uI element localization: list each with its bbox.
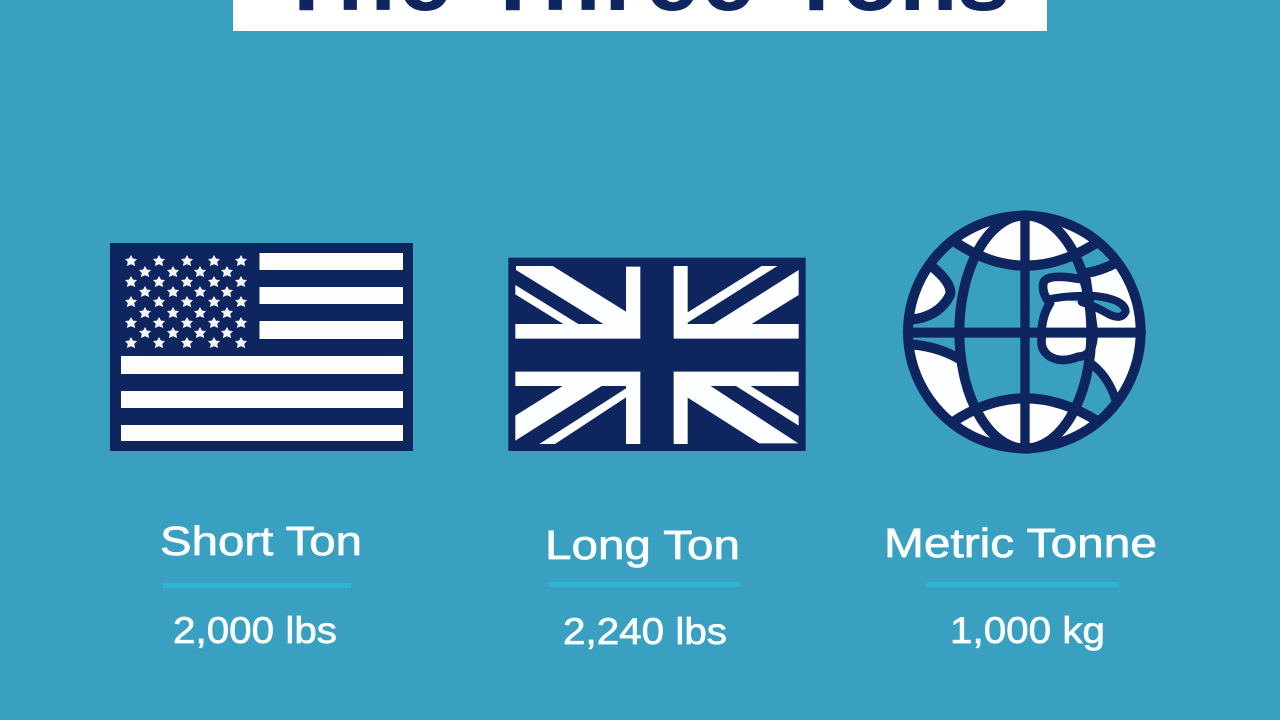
icon: globe [902, 200, 1148, 463]
infographic canvas [110, 0, 1156, 651]
label: Metric Tonne [884, 520, 1157, 566]
column: Long Ton [545, 522, 740, 652]
polar caps and land masses [914, 220, 1136, 444]
label: Short Ton [160, 518, 362, 564]
icon: US flag [110, 243, 413, 451]
value: 2,240 lbs [563, 611, 727, 652]
column: Short Ton [160, 518, 362, 651]
column: Metric Tonne [884, 520, 1157, 651]
title banner [233, 0, 1047, 31]
icon: UK flag [508, 258, 806, 451]
label: Long Ton [545, 522, 740, 568]
value: 1,000 kg [950, 610, 1105, 651]
value: 2,000 lbs [173, 610, 337, 651]
